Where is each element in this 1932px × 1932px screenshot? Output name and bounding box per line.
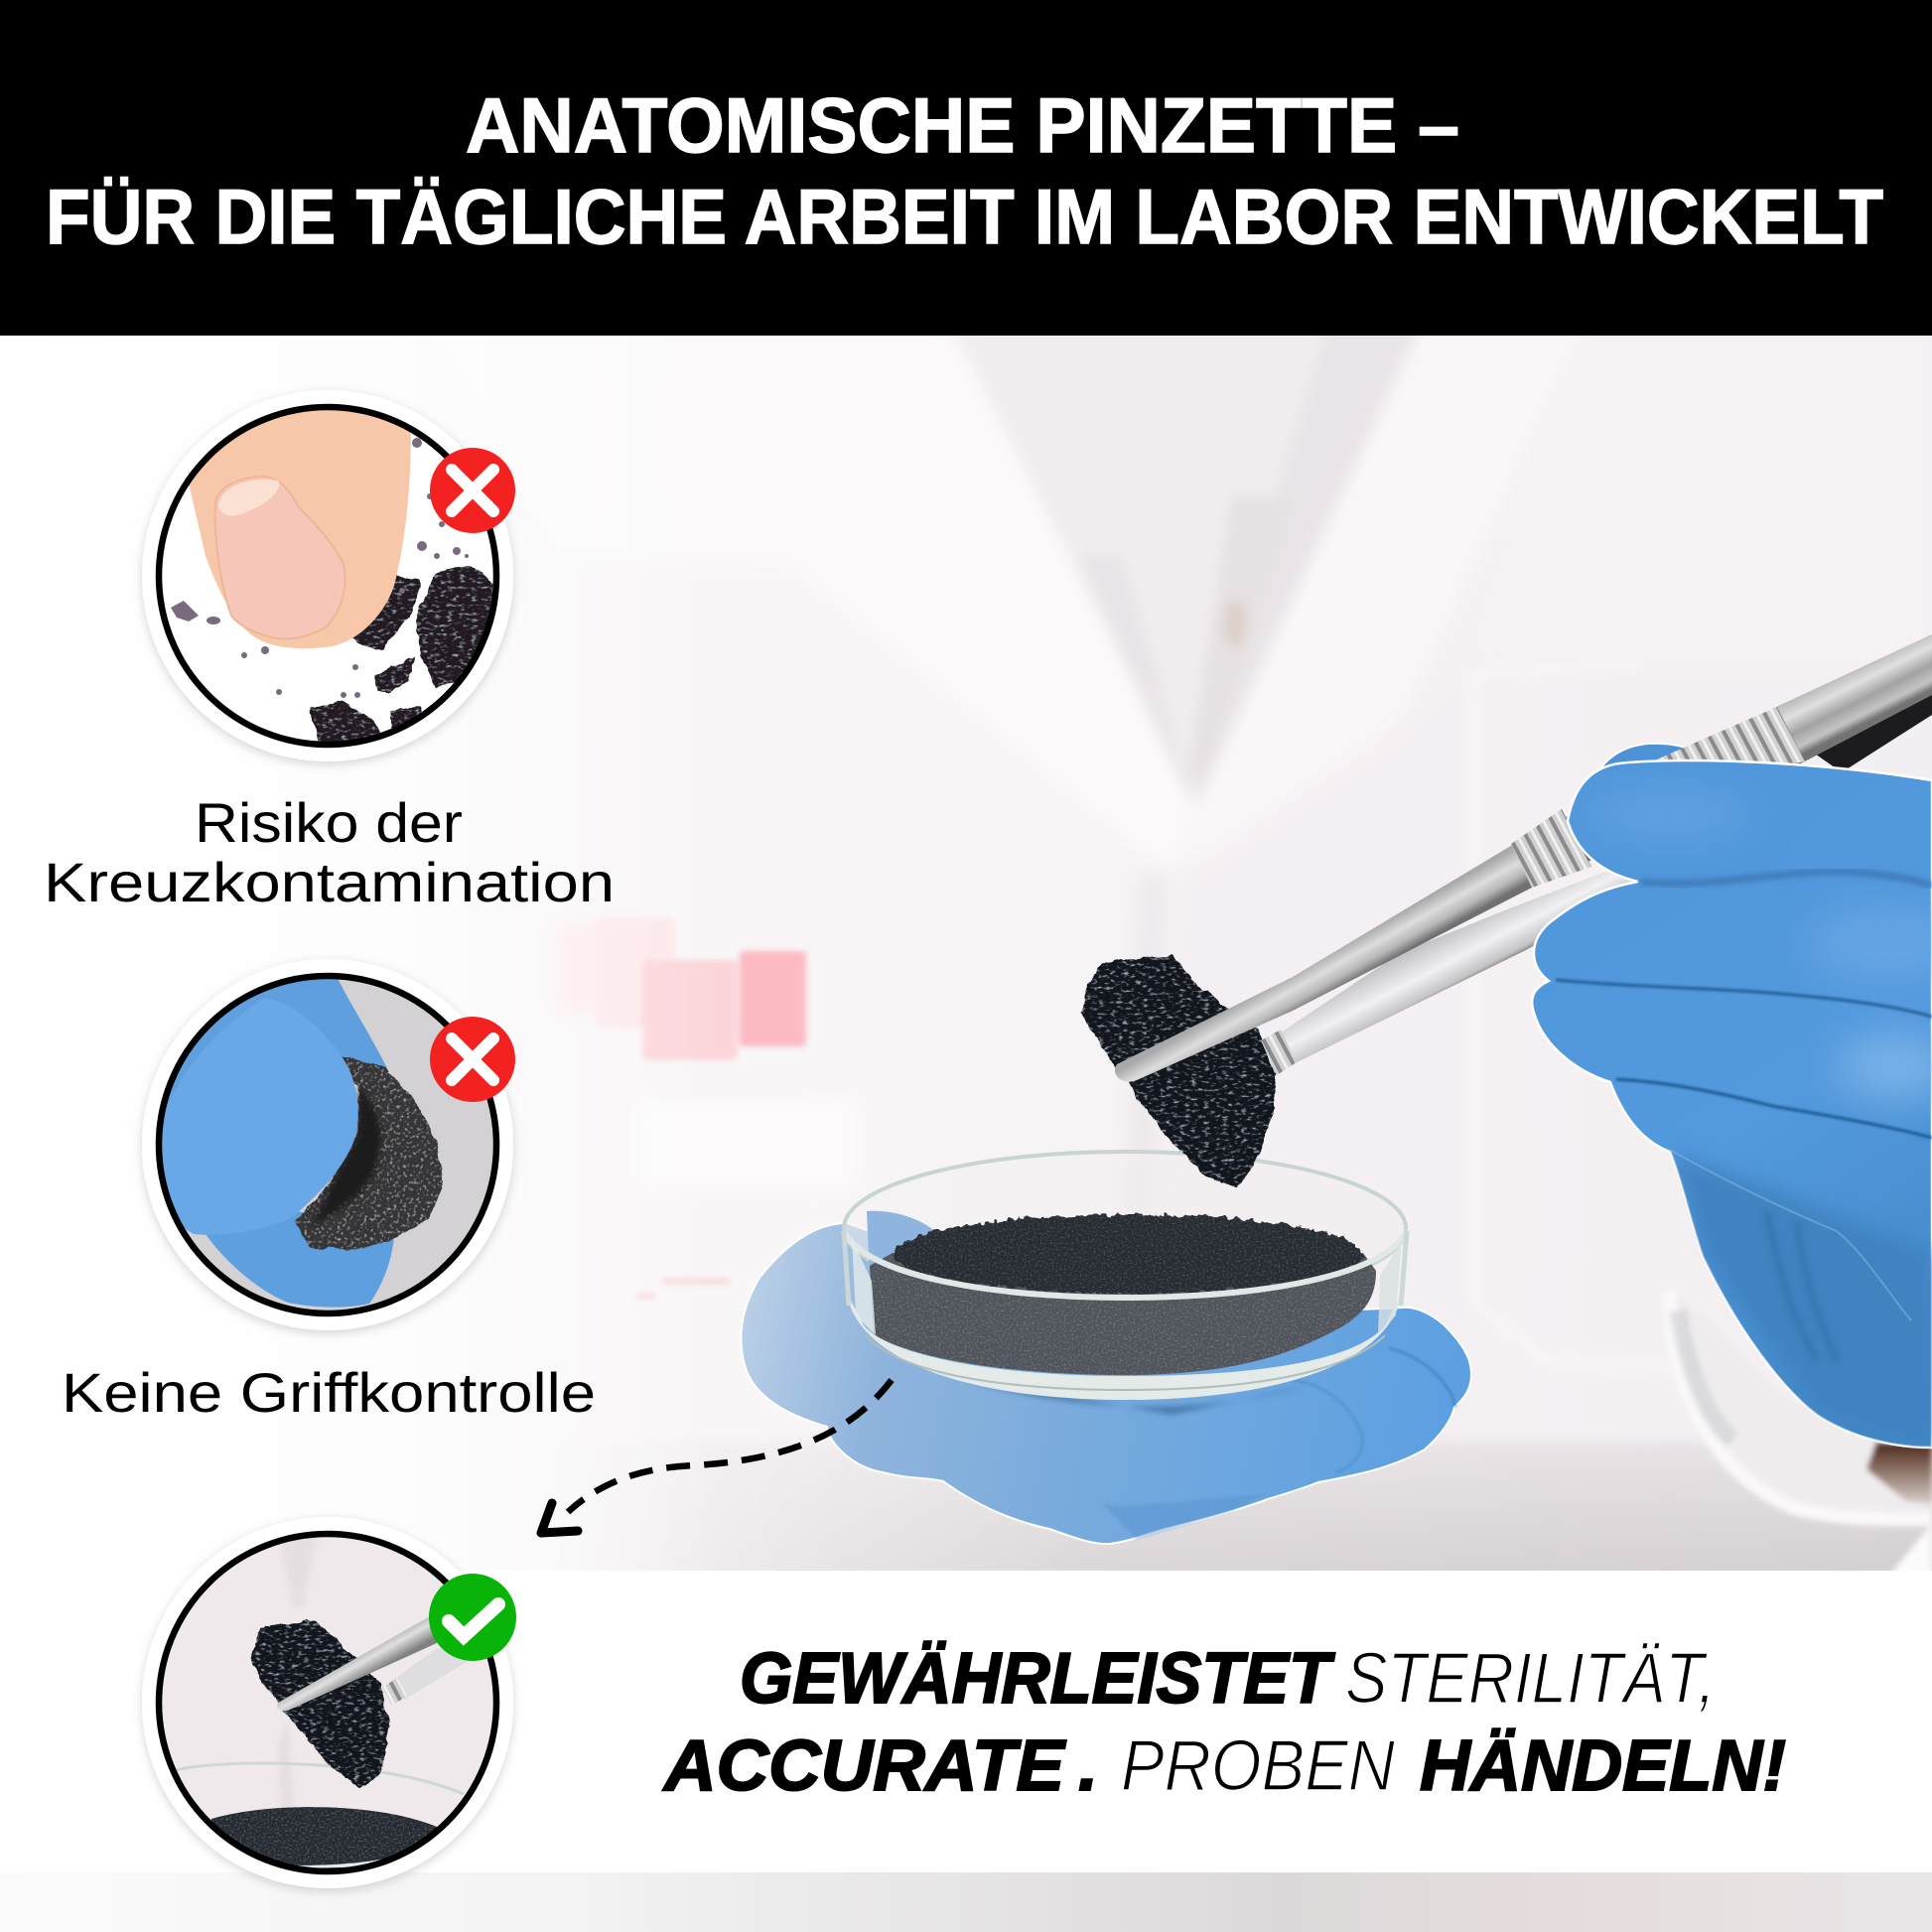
benefit line 2: .	[1078, 1726, 1098, 1806]
mini tweezers lower blade	[389, 1648, 477, 1700]
benefit line 1: STERILITÄT,	[1345, 1639, 1716, 1719]
benefit line 2: ACCURATE	[662, 1726, 1066, 1806]
circle: tweezers correct handling	[142, 1517, 516, 1888]
circle: gloved fingers no grip control	[142, 959, 515, 1330]
icon: red cross badge	[430, 1017, 515, 1102]
powder top	[894, 1214, 1362, 1294]
right gloved hand	[1532, 760, 1932, 1448]
test tube rack	[566, 917, 809, 1301]
coal sample held by tweezers	[1080, 955, 1275, 1189]
caption: cross contamination risk: Risiko der	[195, 791, 463, 854]
mini powder	[211, 1807, 437, 1876]
mini tweezers upper arm	[277, 1616, 437, 1712]
tweezers lower blade	[1263, 854, 1652, 1073]
shirt neckline	[1078, 336, 1414, 791]
lower hand holding dish	[741, 1223, 1471, 1544]
tweezers small serration	[1261, 1030, 1297, 1075]
benefit line 2	[662, 1726, 1786, 1806]
front finger	[149, 998, 358, 1235]
benefit line 1	[740, 1639, 1716, 1719]
dish rim arc	[176, 1763, 464, 1794]
petri dish with powder	[844, 1152, 1407, 1400]
tweezers upper arm	[1115, 634, 1932, 1082]
thumb behind glass	[867, 1211, 950, 1281]
tweezers handle end	[1772, 634, 1932, 764]
benefit line 1: GEWÄHRLEISTET	[740, 1639, 1336, 1719]
coat lapels and panels	[1134, 698, 1192, 1150]
benefit line 2: HÄNDELN!	[1420, 1726, 1786, 1806]
header band	[0, 0, 1932, 336]
left white fade	[0, 336, 715, 1571]
nail moon	[218, 480, 279, 516]
tweezers and right hand	[1080, 634, 1932, 1448]
finger tip behind tweezers	[1588, 744, 1708, 794]
glove folds	[1293, 1380, 1362, 1472]
dish front glass	[844, 1231, 1407, 1298]
icon: red cross badge	[430, 448, 515, 533]
back finger	[166, 979, 389, 1108]
powder side wall	[870, 1253, 1376, 1375]
caption: cross contamination risk: Kreuzkontamination	[44, 851, 615, 913]
coat pocket	[1472, 663, 1678, 1366]
lower finger	[204, 1211, 394, 1308]
tweezers dark edge	[1802, 675, 1932, 772]
coal fragment	[295, 1055, 444, 1249]
circle: fingers cross contamination	[142, 390, 515, 761]
benefit line 2: PROBEN	[1121, 1726, 1396, 1806]
dashed arrow to good example	[541, 1380, 892, 1533]
title line 1: ANATOMISCHE PINZETTE –	[466, 81, 1459, 169]
lab coat photo background	[550, 336, 1932, 1571]
tweezers grip serrations	[1511, 809, 1591, 888]
mini coal sample	[250, 1620, 390, 1789]
caption: cross contamination risk	[44, 791, 615, 913]
thumbnail	[215, 477, 345, 639]
rock dark shadow	[313, 1087, 381, 1226]
highlighted benefit band	[0, 1571, 1932, 1872]
icon: green check badge	[429, 1574, 516, 1661]
sleeve cuff	[1670, 1291, 1932, 1579]
dish back rim	[844, 1152, 1406, 1305]
caption: no grip control: Keine Griffkontrolle	[62, 1361, 596, 1424]
table surface	[679, 1442, 1928, 1571]
thumb	[189, 392, 411, 648]
bottom background strip	[0, 1872, 1932, 1932]
spilled fragments	[310, 566, 493, 747]
